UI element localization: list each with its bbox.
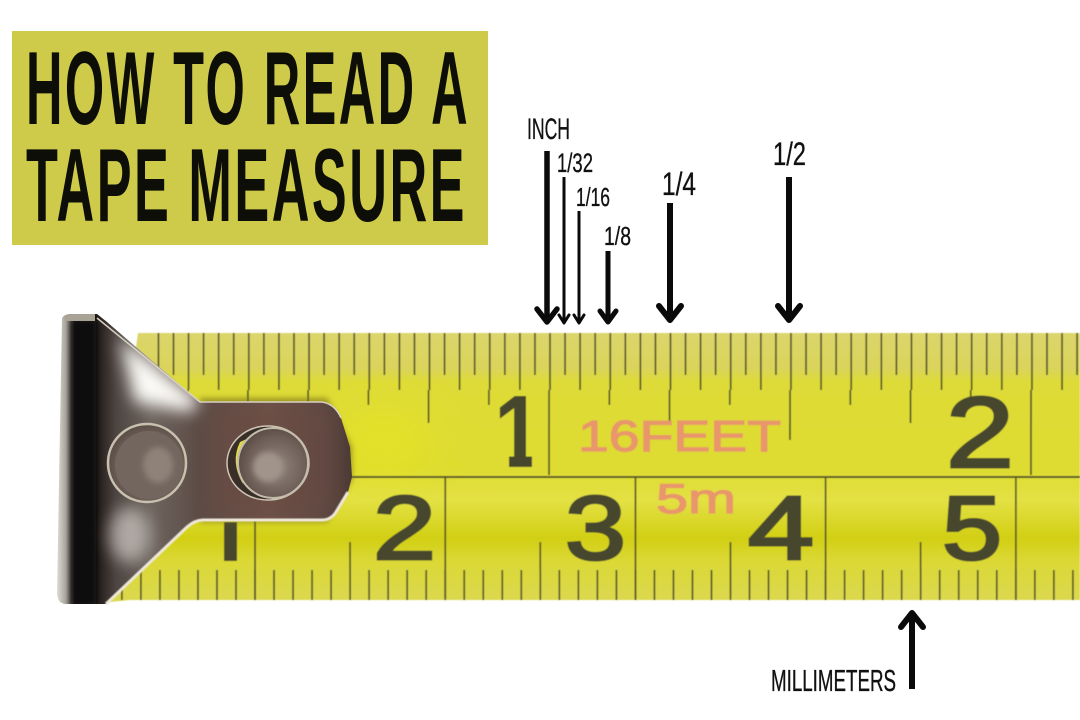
tape numbers [376,395,1010,562]
edge highlights [97,318,341,418]
hidden cm 1 stem [224,522,237,561]
inch numbers: 1 [494,374,542,489]
rivet right [227,426,309,500]
label: MILLIMETERS: MILLIMETERS [771,663,896,698]
label: 1/2: 1/2 [773,136,806,172]
dark band [72,320,96,605]
upper highlight [120,338,200,412]
arrow: 1/2 [778,177,800,320]
5m imprint: 5m [656,475,736,522]
title line 2: TAPE MEASURE [26,128,467,244]
label: 1/4: 1/4 [662,166,696,202]
centimetre numbers: 2 [373,479,436,579]
centre rule [345,476,1080,478]
label: 1/8: 1/8 [604,221,631,251]
arrow: 1/4 [659,203,681,320]
lower highlight [110,507,150,563]
tape measure blade [100,333,1080,603]
tape numbers: 4 [748,479,814,579]
label: 1/16: 1/16 [576,182,610,212]
millimetre ruler ticks [102,538,1080,585]
brown tab shade [210,408,340,513]
16 feet imprint: 16FEET [578,412,781,461]
rivet left [108,424,186,502]
tape numbers: 5 [942,479,1002,579]
top roll [64,314,95,321]
arrow: inch [537,151,557,322]
label: 1/32: 1/32 [557,148,593,178]
glow beside hook [335,402,435,478]
title panel [12,31,488,245]
label: INCH: INCH [527,113,570,146]
arrow: 1/32 [559,177,569,323]
tape numbers: 2 [946,377,1014,489]
arrow: millimeters [901,613,923,689]
inch ruler ticks [158,354,1080,458]
end hook: metal tab [57,314,352,605]
shadow of hook [200,398,352,522]
tape numbers: 3 [565,479,626,579]
arrow: 1/16 [574,211,584,323]
arrow: 1/8 [600,251,616,322]
title panel: HOW TO READ A [26,31,470,147]
